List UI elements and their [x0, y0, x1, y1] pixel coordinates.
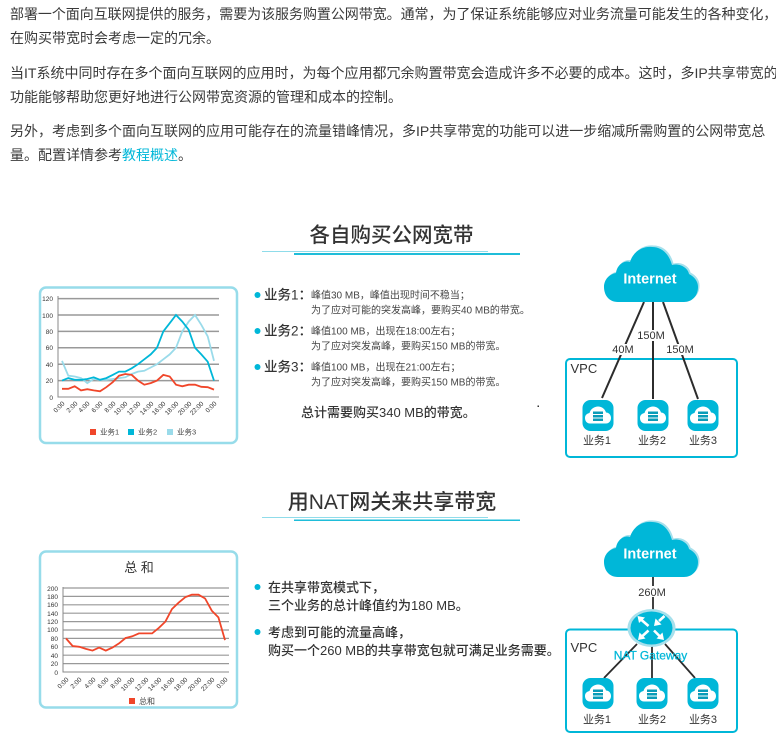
panel: chart of total: 22:00 [200, 676, 217, 693]
text block: service details: 总计需要购买340 MB的带宽。 [301, 405, 476, 420]
diagram: shared bandwidth: 业务1 [583, 713, 611, 726]
legend [129, 696, 155, 706]
text block: service details: 业务1： [264, 288, 312, 302]
panel: chart of three services: 60 [46, 345, 53, 352]
panel: chart of total: 20 [51, 661, 58, 668]
diagram: separate bandwidth: VPC [570, 361, 597, 376]
panel: chart of three services: 0:00 [205, 400, 219, 414]
panel: chart of three services: 14:00 [139, 400, 156, 417]
panel: chart of total: 80 [51, 636, 58, 643]
panel: chart of total: 14:00 [147, 676, 164, 693]
panel: chart of total: 4:00 [84, 676, 98, 690]
diagram: separate bandwidth: 40M [612, 344, 634, 356]
panel: chart of total: 100 [47, 627, 58, 634]
text block: shared bandwidth notes: 在共享带宽模式下， [268, 580, 385, 595]
paragraph: intro [10, 6, 776, 46]
panel: chart of three services: 18:00 [164, 400, 181, 417]
legend: 业务1 [100, 426, 119, 436]
legend [90, 426, 196, 436]
line: total [66, 595, 225, 651]
diagram: shared bandwidth: Internet [623, 546, 677, 562]
icon: cloud [604, 522, 698, 577]
diagram: separate bandwidth: 150M [637, 330, 665, 342]
panel: chart of three services: 120 [42, 296, 53, 303]
text block: service details: 峰值100 MB，出现在18:00左右； [311, 324, 460, 338]
panel: chart of total: 18:00 [173, 676, 190, 693]
paragraph: cost: 当IT系统中同时存在多个面向互联网的应用时，为每个应用都冗余购置带宽会造成许多不必要的成本。这时，多IP共享带宽的 [10, 65, 776, 81]
panel: chart of three services: 6:00 [91, 400, 105, 414]
panel: chart of total: 16:00 [160, 676, 177, 693]
diagram: shared bandwidth: 业务3 [689, 713, 717, 726]
text block: service details [254, 288, 539, 420]
panel: chart of total: 总 和 [124, 560, 154, 575]
panel: chart of total: 0:00 [216, 676, 230, 690]
paragraph: tutorial: 另外，考虑到多个面向互联网的应用可能存在的流量错峰情况，多IP共享带宽的功能可以进一步缩减所需购置的公网带宽总 [10, 123, 765, 139]
panel: chart of total: 180 [47, 594, 58, 601]
box: VPC [566, 359, 737, 457]
panel: chart of total: 120 [47, 619, 58, 626]
diagram: separate bandwidth: 150M [666, 344, 694, 356]
panel: chart of three services: 100 [42, 313, 53, 320]
panel: chart of total: 20:00 [187, 676, 204, 693]
line: service 2 [62, 315, 214, 381]
panel: chart of three services: 20:00 [177, 400, 194, 417]
diagram: separate bandwidth: 业务3 [689, 434, 717, 447]
text block: shared bandwidth notes: 购买一个260 MB的共享带宽包就可满足业务需要。 [268, 643, 560, 658]
panel: chart of three services: 20 [46, 378, 53, 385]
panel: chart of three services: 40 [46, 362, 53, 369]
diagram: shared bandwidth [566, 520, 737, 732]
diagram: shared bandwidth: 业务2 [638, 713, 666, 726]
text block: service details: 为了应对可能的突发高峰，要购买40 MB的带宽。 [311, 304, 530, 316]
legend: 业务3 [177, 426, 196, 436]
paragraph: tutorial: 量。配置详情参考教程概述。 [10, 147, 192, 163]
panel: chart of three services: 10:00 [113, 400, 130, 417]
panel: chart of total: 0:00 [57, 676, 71, 690]
line: service 3 [62, 315, 214, 383]
paragraph: cost [10, 65, 776, 105]
text block: shared bandwidth notes: 考虑到可能的流量高峰， [268, 625, 411, 640]
panel: chart of total: 2:00 [70, 676, 84, 690]
diagram: shared bandwidth: VPC [570, 640, 597, 655]
legend: 业务2 [138, 426, 157, 436]
panel: chart of total: 0 [54, 670, 58, 677]
panel: chart of three services: 80 [46, 329, 53, 336]
diagram: shared bandwidth: NAT Gateway [614, 648, 687, 662]
paragraph: cost: 功能能够帮助您更好地进行公网带宽资源的管理和成本的控制。 [10, 89, 402, 105]
line: service 1 [62, 374, 214, 391]
text block: shared bandwidth notes [254, 580, 560, 658]
text block: service details: 为了应对突发高峰，要购买150 MB的带宽。 [311, 340, 505, 352]
paragraph: intro: 在购买带宽时会考虑一定的冗余。 [10, 30, 220, 46]
panel: chart of total: 200 [47, 586, 58, 593]
box: VPC [566, 630, 737, 732]
panel: chart of total: 40 [51, 653, 58, 660]
panel: chart of total: 10:00 [120, 676, 137, 693]
paragraph: intro: 部署一个面向互联网提供的服务，需要为该服务购置公网带宽。通常，为了保证系统能够应对业务流量可能发生的各种变化， [10, 6, 776, 22]
diagram: separate bandwidth: Internet [623, 272, 677, 288]
icon: NAT gateway router [628, 609, 676, 647]
panel: chart of three services: 0 [49, 395, 53, 402]
heading: separate purchase: 各自购买公网宽带 [310, 224, 474, 247]
panel: chart of total: 6:00 [97, 676, 111, 690]
diagram: separate bandwidth [566, 245, 737, 457]
icon: cloud [604, 247, 698, 302]
text block: service details: 为了应对突发高峰，要购买150 MB的带宽。 [311, 376, 505, 388]
paragraph: tutorial [10, 123, 765, 163]
diagram: separate bandwidth: 业务1 [583, 434, 611, 447]
panel: chart of three services: 8:00 [104, 400, 118, 414]
panel: chart of three services: 12:00 [126, 400, 143, 417]
panel: chart of total: 8:00 [110, 676, 124, 690]
panel: chart of total: 60 [51, 644, 58, 651]
panel: chart of three services: 0:00 [53, 400, 67, 414]
text block: shared bandwidth notes: 三个业务的总计峰值约为180 MB。 [268, 598, 469, 613]
heading: shared bandwidth: 用NAT网关来共享带宽 [288, 491, 496, 514]
panel: chart of total: 160 [47, 602, 58, 609]
text block: service details: 峰值30 MB，峰值出现时间不稳当； [311, 288, 470, 302]
text block: service details: 业务2： [264, 324, 312, 338]
legend: 总和 [139, 696, 155, 706]
text block: service details: 峰值100 MB，出现在21:00左右； [311, 360, 460, 374]
panel: chart of three services: 16:00 [151, 400, 168, 417]
panel: chart of total: 12:00 [134, 676, 151, 693]
panel: chart of three services: 22:00 [189, 400, 206, 417]
panel: chart of three services: 4:00 [78, 400, 92, 414]
diagram: separate bandwidth: 业务2 [638, 434, 666, 447]
panel: chart of three services [40, 288, 237, 443]
diagram: shared bandwidth: 260M [638, 587, 666, 599]
text block: service details: 业务3： [264, 360, 312, 374]
panel: chart of total: 140 [47, 611, 58, 618]
panel: chart of three services: 2:00 [66, 400, 80, 414]
panel: chart of total [40, 552, 237, 708]
